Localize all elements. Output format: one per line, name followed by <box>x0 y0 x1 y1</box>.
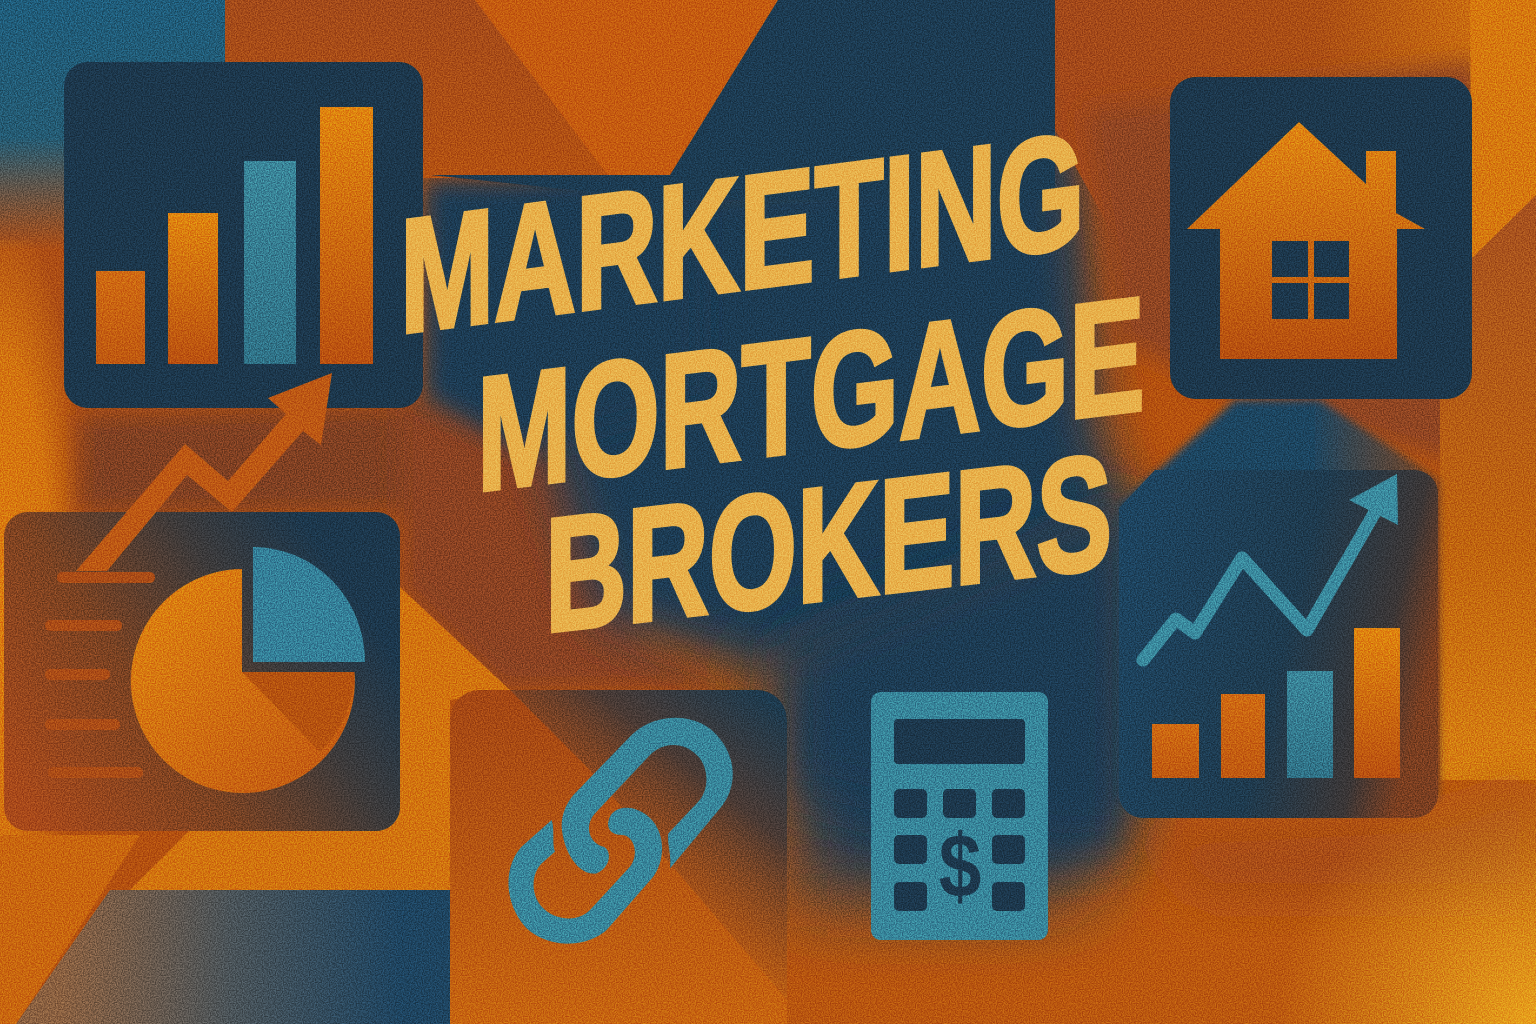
arrow: blue trend line <box>1143 474 1398 660</box>
bar chart <box>96 107 373 364</box>
icon: calculator <box>871 692 1048 940</box>
dollar sign: $ <box>939 815 981 916</box>
icon: house <box>1187 122 1425 359</box>
title <box>400 98 1145 667</box>
panel: growth chart card <box>1119 470 1438 818</box>
title: MORTGAGE <box>477 262 1145 526</box>
title: MARKETING <box>400 98 1085 368</box>
bar chart <box>1152 628 1400 778</box>
legend lines <box>45 572 155 778</box>
arrow: orange rising arrow <box>76 373 332 571</box>
icon: chain link <box>508 718 733 944</box>
icon: pie chart <box>131 547 365 793</box>
title: BROKERS <box>545 420 1112 667</box>
panel: house card <box>1170 77 1472 399</box>
panel: bar chart card <box>64 62 423 408</box>
panel: pie chart card <box>4 512 400 831</box>
